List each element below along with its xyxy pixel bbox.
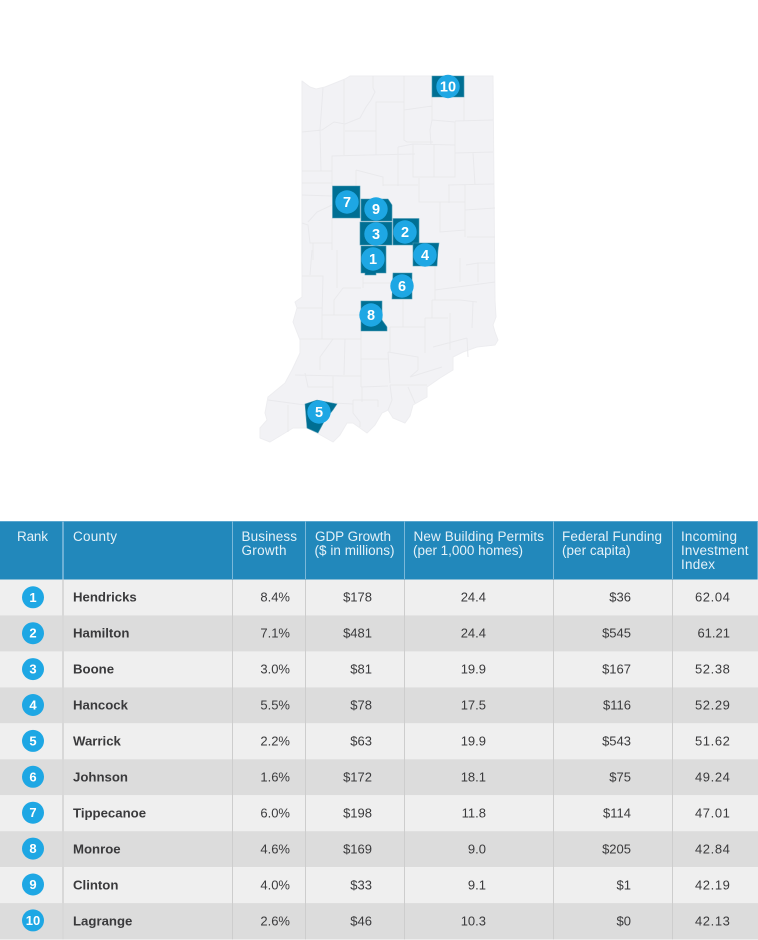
map marker 6 — [390, 274, 414, 298]
table header — [0, 521, 758, 580]
county boundaries — [268, 76, 495, 432]
row 6: Johnson — [22, 766, 730, 788]
map marker 7: 7 — [343, 195, 351, 211]
row 7: Tippecanoe: 47.01 — [695, 806, 730, 820]
row 4: Hancock — [22, 694, 730, 716]
row 1: Hendricks: $36 — [609, 590, 631, 604]
row 2: Hamilton: $481 — [343, 626, 372, 640]
row 3: Boone: $167 — [602, 662, 631, 676]
row 7: Tippecanoe: Tippecanoe — [73, 806, 146, 820]
highlighted county: Tippecanoe — [332, 186, 360, 218]
row 9: Clinton: 42.19 — [695, 878, 730, 892]
row 2: Hamilton: 61.21 — [697, 626, 730, 640]
table header: Investment — [681, 543, 749, 558]
row 8: Monroe — [22, 838, 730, 860]
map: Indiana counties — [260, 75, 498, 442]
row 4: Hancock: 5.5% — [260, 698, 290, 712]
table header: County — [73, 529, 117, 544]
row 2: Hamilton — [22, 622, 730, 644]
row 1: Hendricks — [22, 586, 730, 608]
row 6: Johnson: 49.24 — [695, 770, 730, 784]
row 1: Hendricks: Hendricks — [73, 590, 137, 604]
row 6: Johnson: 6 — [29, 769, 37, 784]
row 1: Hendricks: 62.04 — [695, 590, 730, 604]
row 4: Hancock: 17.5 — [461, 698, 486, 712]
map marker 9 — [364, 197, 388, 221]
highlighted county: Monroe — [361, 301, 387, 331]
row 2: Hamilton: $545 — [602, 626, 631, 640]
map marker 8 — [359, 303, 383, 327]
table header: (per 1,000 homes) — [413, 543, 523, 558]
table header: GDP Growth — [315, 529, 391, 544]
row 9: Clinton: 9 — [29, 877, 37, 892]
row 6: Johnson: $75 — [609, 770, 631, 784]
table header: New Building Permits — [414, 529, 544, 544]
row 5: Warrick: Warrick — [73, 734, 122, 748]
map marker 3 — [364, 222, 388, 246]
map marker 2: 2 — [401, 225, 409, 241]
row 4: Hancock: Hancock — [73, 698, 129, 712]
row 10: Lagrange — [22, 909, 730, 931]
row 8: Monroe: 9.0 — [468, 842, 486, 856]
row 3: Boone — [22, 658, 730, 680]
row 1: Hendricks: 8.4% — [260, 590, 290, 604]
map marker 7 — [335, 190, 359, 214]
row 3: Boone: 3 — [29, 662, 37, 677]
row 4: Hancock: 52.29 — [695, 698, 730, 712]
map marker 10 — [436, 75, 460, 98]
highlighted county: Johnson — [392, 273, 412, 299]
row 7: Tippecanoe: 6.0% — [260, 806, 290, 820]
highlighted county: Hamilton — [393, 218, 419, 245]
row 3: Boone: $81 — [350, 662, 372, 676]
row 7: Tippecanoe: $198 — [343, 806, 372, 820]
map marker 3: 3 — [372, 227, 380, 243]
row 8: Monroe: 4.6% — [260, 842, 290, 856]
row 5: Warrick: 2.2% — [260, 734, 290, 748]
row 9: Clinton — [22, 874, 730, 896]
row 5: Warrick: $63 — [350, 734, 372, 748]
map marker 4 — [413, 243, 437, 267]
row 10: Lagrange: 2.6% — [260, 914, 290, 928]
row 8: Monroe: 8 — [29, 841, 37, 856]
map marker 8: 8 — [367, 308, 375, 324]
row 4: Hancock: $116 — [603, 698, 631, 712]
map marker 9: 9 — [372, 202, 380, 218]
row 10: Lagrange: Lagrange — [73, 914, 132, 928]
row 4: Hancock: 4 — [29, 698, 37, 712]
row 10: Lagrange: $46 — [350, 914, 372, 928]
row 1: Hendricks: 24.4 — [461, 590, 486, 604]
row 5: Warrick: $543 — [602, 734, 631, 748]
table header: Rank — [17, 529, 48, 544]
row 7: Tippecanoe: 11.8 — [462, 806, 486, 820]
row 2: Hamilton: 7.1% — [260, 626, 290, 640]
row 10: Lagrange: 42.13 — [695, 914, 730, 928]
row backgrounds — [0, 580, 758, 940]
row 9: Clinton: Clinton — [73, 878, 118, 892]
table header: Growth — [242, 543, 286, 558]
table header: ($ in millions) — [314, 543, 394, 558]
row 5: Warrick: 19.9 — [461, 734, 486, 748]
row 2: Hamilton: 2 — [29, 626, 37, 641]
row 1: Hendricks: 1 — [29, 590, 37, 605]
row 9: Clinton: $33 — [350, 878, 372, 892]
highlighted county: Warrick — [305, 400, 337, 433]
row 3: Boone: Boone — [73, 662, 114, 676]
row 2: Hamilton: Hamilton — [73, 626, 129, 640]
row 2: Hamilton: 24.4 — [461, 626, 486, 640]
row 5: Warrick: 51.62 — [695, 734, 730, 748]
map marker 4: 4 — [421, 248, 429, 264]
row 6: Johnson: $172 — [343, 770, 372, 784]
map marker 1 — [361, 247, 385, 271]
row 8: Monroe: Monroe — [73, 842, 121, 856]
table header: Incoming — [681, 529, 737, 544]
row 5: Warrick: 5 — [29, 733, 37, 748]
row 3: Boone: 52.38 — [695, 662, 730, 676]
map marker 6: 6 — [398, 279, 406, 295]
map marker 10: 10 — [440, 80, 456, 96]
row 7: Tippecanoe — [22, 802, 730, 824]
highlighted county: Hendricks — [361, 246, 386, 275]
row 3: Boone: 3.0% — [260, 662, 290, 676]
row 10: Lagrange: $0 — [617, 914, 631, 928]
row 10: Lagrange: 10 — [26, 913, 40, 928]
table header: Federal Funding — [562, 529, 662, 544]
row 9: Clinton: $1 — [617, 878, 631, 892]
table header: (per capita) — [562, 543, 630, 558]
highlighted county: Lagrange — [432, 76, 464, 97]
row 7: Tippecanoe: 7 — [29, 805, 37, 820]
highlighted county: Boone — [360, 222, 392, 245]
row 6: Johnson: 18.1 — [461, 770, 486, 784]
row 6: Johnson: 1.6% — [260, 770, 290, 784]
row 3: Boone: 19.9 — [461, 662, 486, 676]
map marker 5 — [307, 400, 331, 424]
row 4: Hancock: $78 — [350, 698, 372, 712]
map marker 1: 1 — [369, 252, 377, 268]
map marker 2 — [393, 220, 417, 244]
row 5: Warrick — [22, 730, 730, 752]
row 1: Hendricks: $178 — [343, 590, 372, 604]
table header: Index — [681, 557, 715, 572]
row 6: Johnson: Johnson — [73, 770, 128, 784]
table header: Business — [242, 529, 297, 544]
state outline — [260, 76, 498, 442]
row 8: Monroe: $205 — [602, 842, 631, 856]
row 9: Clinton: 4.0% — [260, 878, 290, 892]
row 10: Lagrange: 10.3 — [461, 914, 486, 928]
map marker 5: 5 — [315, 405, 323, 421]
row 9: Clinton: 9.1 — [468, 878, 486, 892]
highlighted county: Hancock — [413, 243, 439, 266]
highlighted county: Clinton — [361, 199, 392, 221]
row 8: Monroe: 42.84 — [695, 842, 730, 856]
row 7: Tippecanoe: $114 — [603, 806, 631, 820]
table — [0, 521, 758, 940]
row 8: Monroe: $169 — [343, 842, 372, 856]
